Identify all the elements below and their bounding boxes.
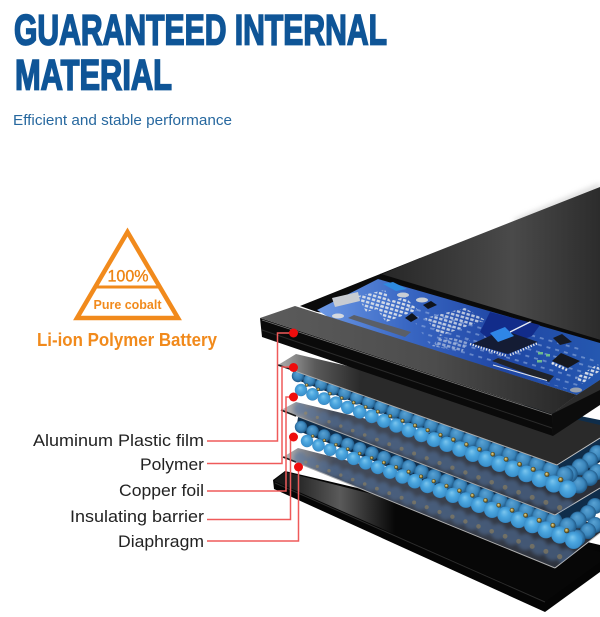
callout: insulating barrier <box>207 432 298 520</box>
silver oval right <box>570 388 582 392</box>
battery exploded illustration <box>260 186 600 612</box>
component labels: Insulating barrier <box>70 507 204 526</box>
bottom sheet <box>283 448 600 568</box>
component labels: Polymer <box>140 455 204 474</box>
middle sheet <box>281 402 600 517</box>
callout: aluminum plastic film <box>207 328 298 441</box>
back frame <box>300 258 600 345</box>
bright blue tab <box>383 282 407 291</box>
callout: diaphragm <box>207 462 303 541</box>
component labels: Diaphragm <box>118 532 204 551</box>
main chip <box>470 330 538 356</box>
circuit board <box>317 279 600 395</box>
callout lines and dots <box>207 328 303 541</box>
title <box>14 6 387 100</box>
icon: pure cobalt triangle: Pure cobalt <box>94 298 162 312</box>
lower ball layer <box>295 405 600 549</box>
solder pad grids <box>358 290 392 312</box>
white antenna <box>510 319 536 332</box>
icon: pure cobalt triangle <box>77 232 178 318</box>
white connector <box>332 292 360 307</box>
front bar <box>260 306 600 436</box>
dark blue region <box>480 312 540 348</box>
right chip <box>552 353 580 370</box>
top panel <box>380 187 600 341</box>
callout: polymer <box>207 363 298 464</box>
callout: copper foil <box>207 392 298 491</box>
title: MATERIAL <box>15 52 172 100</box>
bottom tray <box>273 471 600 612</box>
bright blue block <box>490 327 514 342</box>
small dark chips <box>553 334 572 345</box>
top sheet <box>278 354 600 465</box>
silver oval <box>332 314 344 318</box>
component labels <box>33 431 204 551</box>
component labels: Aluminum Plastic film <box>33 431 204 450</box>
bottom connector <box>348 315 411 337</box>
back panel shadow <box>515 186 600 222</box>
subtitle: Efficient and stable performance <box>13 113 232 129</box>
title: GUARANTEED INTERNAL <box>14 6 387 54</box>
green components <box>537 352 550 362</box>
upper ball layer <box>292 360 600 498</box>
long connector <box>492 358 554 382</box>
icon: pure cobalt triangle: 100% <box>108 268 149 286</box>
component labels: Copper foil <box>119 481 204 500</box>
battery type label: Li-ion Polymer Battery <box>37 330 217 350</box>
